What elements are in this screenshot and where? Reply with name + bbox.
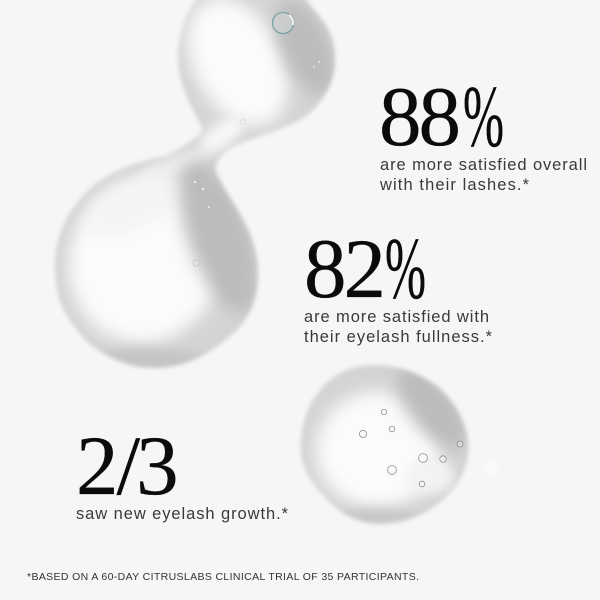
lower lobe shadow bbox=[172, 156, 258, 316]
faint satellite droplet bbox=[483, 461, 497, 475]
stat: 88%: % bbox=[463, 68, 504, 166]
stat: 82%: their eyelash fullness.* bbox=[304, 328, 493, 346]
stat: 82%: are more satisfied with bbox=[304, 308, 489, 326]
stat: 2/3 bbox=[76, 419, 289, 523]
stat: 82%: % bbox=[385, 220, 426, 318]
shadow bbox=[392, 370, 466, 452]
footnote: *BASED ON A 60-DAY CITRUSLABS CLINICAL TRIAL OF 35 PARTICIPANTS. bbox=[27, 571, 419, 583]
upper lobe highlight bbox=[182, 0, 294, 131]
stat: 88%: are more satisfied overall bbox=[380, 156, 587, 174]
bubbles in small droplet bbox=[359, 409, 463, 487]
stat: 2/3: 2/3 bbox=[76, 419, 179, 513]
highlight bbox=[316, 392, 440, 508]
stat: 82%: 82 bbox=[304, 222, 386, 316]
stat: 82% bbox=[304, 220, 493, 346]
stat: 2/3: saw new eyelash growth.* bbox=[76, 505, 289, 523]
stat: 88%: 88 bbox=[379, 70, 461, 164]
bubble: teal ring bbox=[272, 12, 294, 34]
upper lobe shadow bbox=[269, 0, 335, 98]
large gel droplet bbox=[54, 0, 337, 370]
lower lobe highlight bbox=[63, 174, 216, 346]
small gel droplet bbox=[299, 364, 470, 526]
stat: 88% bbox=[379, 68, 587, 194]
small bubbles in large droplet bbox=[193, 61, 320, 266]
stat: 88%: with their lashes.* bbox=[379, 176, 530, 194]
